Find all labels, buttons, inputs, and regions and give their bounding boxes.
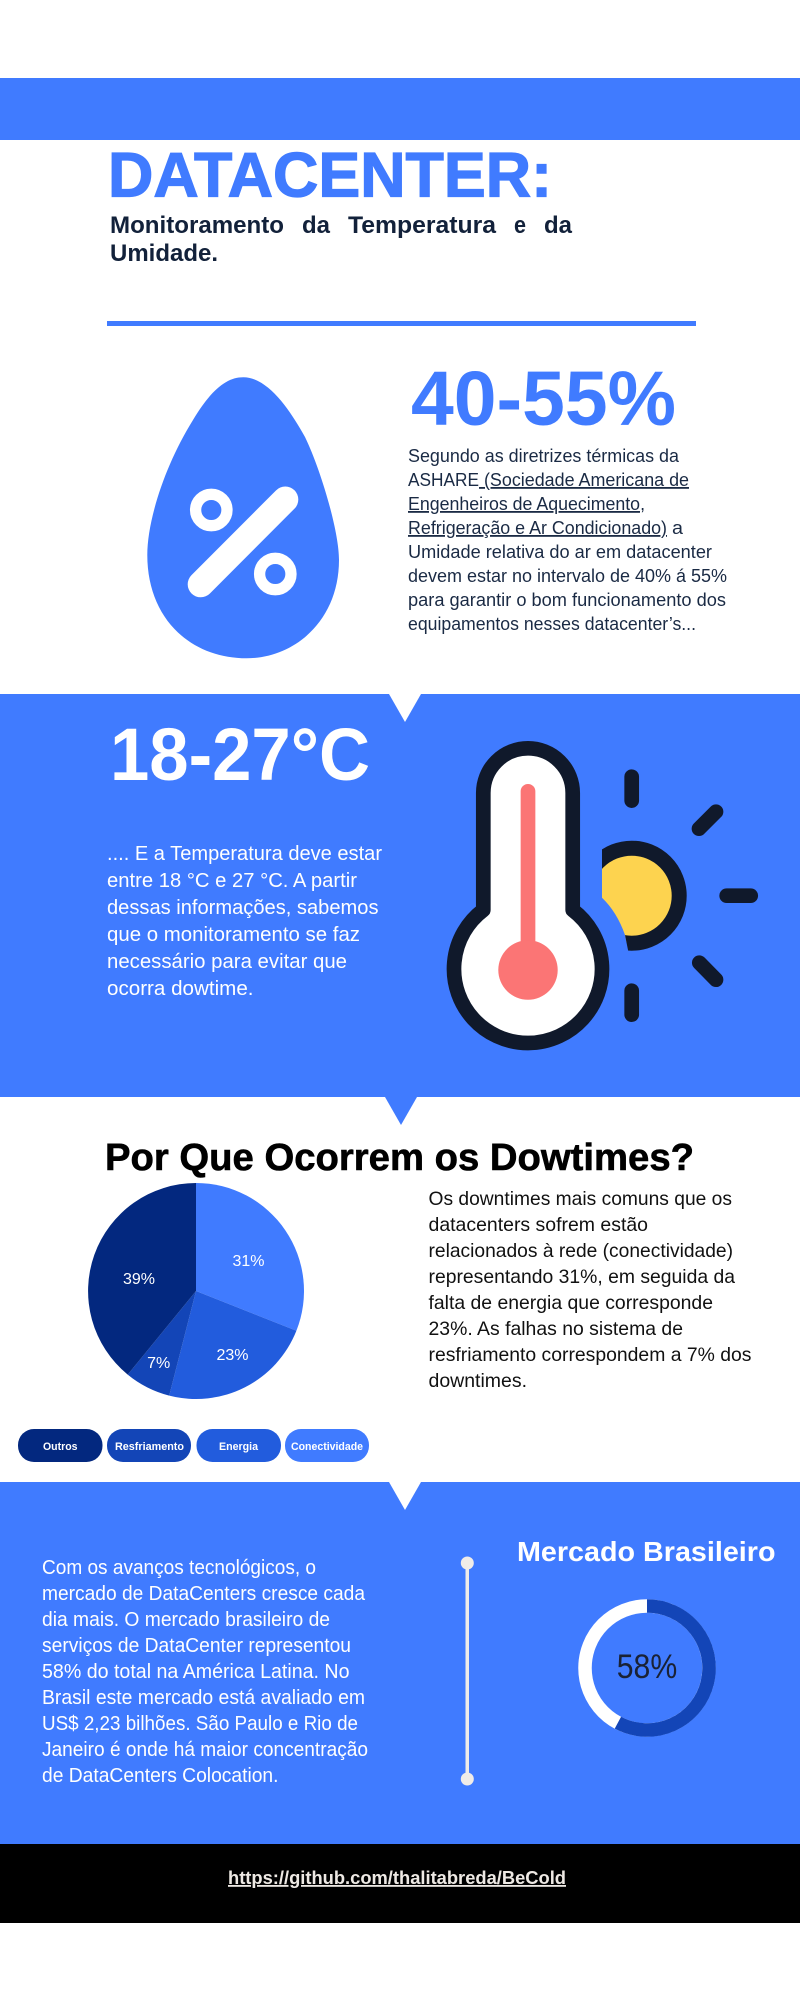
humidity paragraph: (Sociedade Americana de xyxy=(479,470,689,490)
market paragraph: US$ 2,23 bilhões. São Paulo e Rio de xyxy=(42,1713,358,1735)
icon: humidity drop with percent xyxy=(147,377,339,658)
footer band xyxy=(0,1844,800,1923)
icon: thermometer xyxy=(454,748,602,1043)
temperature paragraph: que o monitoramento se faz xyxy=(107,923,360,946)
temperature paragraph: .... E a Temperatura deve estar xyxy=(107,842,382,865)
humidity paragraph: devem estar no intervalo de 40% á 55% xyxy=(408,566,727,586)
humidity paragraph: Refrigeração e Ar Condicionado) xyxy=(408,518,667,538)
donut chart: 58% xyxy=(617,1648,677,1686)
temperature paragraph: ocorra dowtime. xyxy=(107,977,254,1000)
title: DATACENTER: xyxy=(108,141,552,211)
downtimes paragraph: relacionados à rede (conectividade) xyxy=(428,1240,733,1262)
market paragraph: Janeiro é onde há maior concentração xyxy=(42,1739,368,1761)
humidity paragraph xyxy=(408,446,727,634)
temperature paragraph xyxy=(107,842,382,1000)
market paragraph xyxy=(42,1557,368,1787)
panel: temperature xyxy=(0,694,800,1125)
legend xyxy=(18,1429,369,1462)
downtimes paragraph: Os downtimes mais comuns que os xyxy=(428,1188,732,1210)
donut chart xyxy=(585,1606,709,1730)
humidity range figure: 40-55% xyxy=(411,356,676,442)
subtitle: da xyxy=(544,212,573,239)
temperature range figure: 18-27°C xyxy=(110,713,370,796)
subtitle xyxy=(110,212,573,267)
legend: Energia xyxy=(219,1441,259,1453)
downtimes paragraph: datacenters sofrem estão xyxy=(428,1214,648,1236)
pie chart: 7% xyxy=(147,1355,170,1372)
market paragraph: mercado de DataCenters cresce cada xyxy=(42,1583,366,1605)
market paragraph: dia mais. O mercado brasileiro de xyxy=(42,1609,330,1631)
icon: sun xyxy=(584,777,751,1015)
timeline divider xyxy=(461,1556,474,1786)
subtitle: Monitoramento xyxy=(110,212,284,239)
humidity paragraph: Segundo as diretrizes térmicas da xyxy=(408,446,680,466)
temperature paragraph: dessas informações, sabemos xyxy=(107,896,378,919)
humidity paragraph: equipamentos nesses datacenter’s... xyxy=(408,614,696,634)
panel: brazilian market xyxy=(0,1482,800,1844)
market heading: Mercado Brasileiro xyxy=(517,1536,776,1567)
legend: Conectividade xyxy=(291,1441,363,1453)
downtimes paragraph: resfriamento correspondem a 7% dos xyxy=(428,1344,752,1366)
market paragraph: 58% do total na América Latina. No xyxy=(42,1661,350,1683)
temperature paragraph: entre 18 °C e 27 °C. A partir xyxy=(107,869,357,892)
downtimes paragraph: representando 31%, em seguida da xyxy=(428,1266,735,1288)
market paragraph: Com os avanços tecnológicos, o xyxy=(42,1557,316,1579)
downtimes paragraph xyxy=(428,1188,752,1392)
humidity paragraph: Umidade relativa do ar em datacenter xyxy=(408,542,712,562)
downtimes paragraph: 23%. As falhas no sistema de xyxy=(428,1318,683,1340)
pie chart: 39% xyxy=(123,1271,155,1288)
market paragraph: serviços de DataCenter representou xyxy=(42,1635,351,1657)
humidity paragraph: ASHARE xyxy=(408,470,479,490)
subtitle: da xyxy=(302,212,331,239)
market paragraph: de DataCenters Colocation. xyxy=(42,1765,278,1787)
subtitle: Temperatura xyxy=(348,212,497,239)
pie chart xyxy=(88,1183,304,1399)
pie chart: 23% xyxy=(216,1347,249,1364)
humidity paragraph: a xyxy=(672,518,684,538)
humidity paragraph: Engenheiros de Aquecimento, xyxy=(408,494,645,514)
humidity paragraph: para garantir o bom funcionamento dos xyxy=(408,590,726,610)
legend: Outros xyxy=(43,1441,78,1453)
market paragraph: Brasil este mercado está avaliado em xyxy=(42,1687,365,1709)
subtitle: e xyxy=(514,212,526,239)
footer link: https://github.com/thalitabreda/BeCold xyxy=(228,1868,566,1888)
downtimes paragraph: falta de energia que corresponde xyxy=(428,1292,713,1314)
pie chart: 31% xyxy=(232,1253,265,1270)
top banner xyxy=(0,78,800,140)
temperature paragraph: necessário para evitar que xyxy=(107,950,347,973)
heading: downtimes: Por Que Ocorrem os Dowtimes? xyxy=(105,1137,694,1179)
legend: Resfriamento xyxy=(115,1441,184,1453)
subtitle: Umidade. xyxy=(110,240,218,267)
downtimes paragraph: downtimes. xyxy=(428,1370,527,1392)
